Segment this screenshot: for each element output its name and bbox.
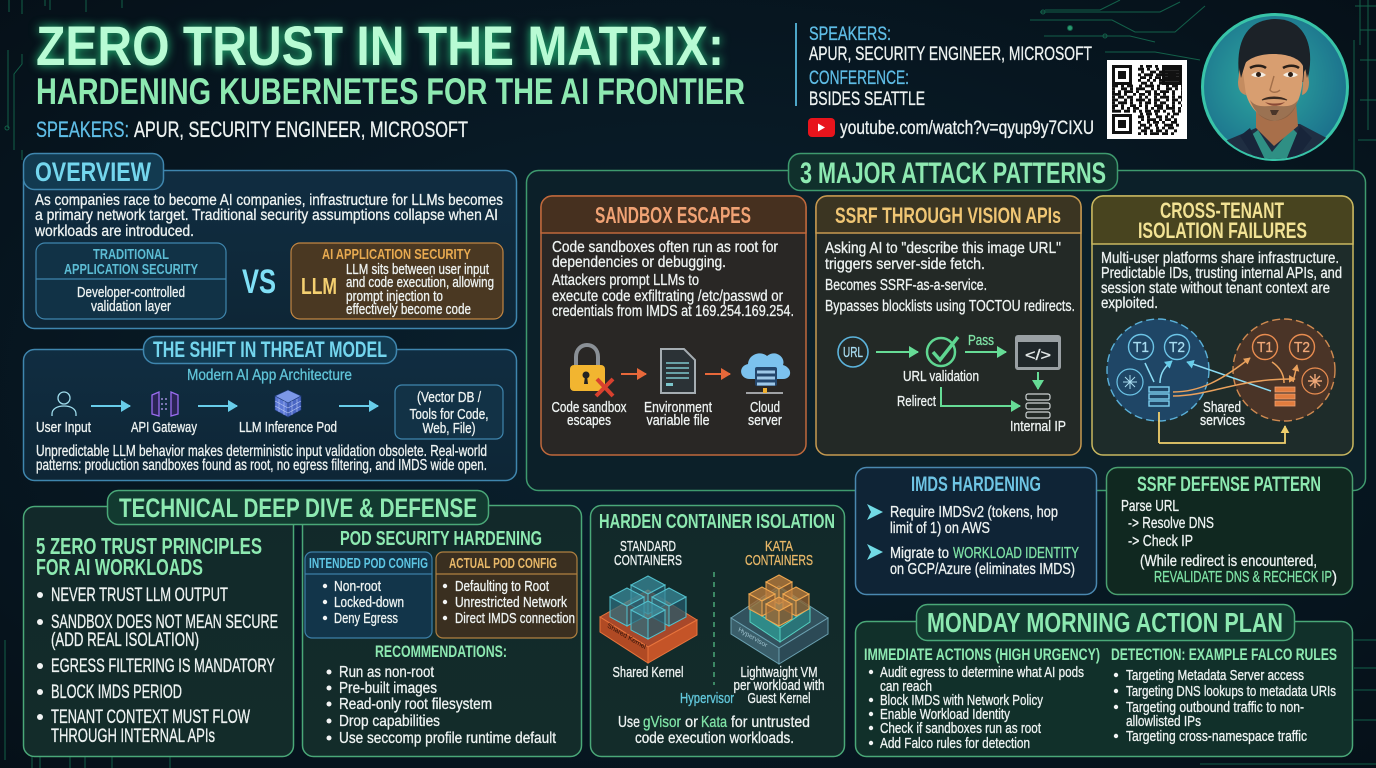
panel: harden container isolation: HARDEN CONTAINER ISOLATION: [599, 511, 835, 533]
arrow: [91, 405, 130, 407]
immediate actions list: Enable Workload Identity: [880, 706, 1010, 723]
isolation recommendation: Kata: [701, 714, 727, 731]
youtube url: youtube.com/watch?v=qyup9y7CIXU: [840, 118, 1094, 139]
tools box: (Vector DB /: [417, 389, 482, 406]
principles list: BLOCK IMDS PERIOD: [51, 682, 182, 703]
actual pod config: [436, 552, 577, 638]
sandbox text: Attackers prompt LLMs to: [552, 272, 699, 289]
heading tab: technical deep dive: TECHNICAL DEEP DIVE & DEFENSE: [119, 493, 477, 523]
panel: imds hardening: IMDS HARDENING: [911, 473, 1041, 496]
icon: url: URL: [843, 344, 863, 361]
imds bullet 1: limit of 1) on AWS: [890, 520, 990, 537]
comparison: ai application security: and code execution, allowing: [346, 274, 494, 291]
panel: the shift in threat model: [24, 336, 516, 480]
principles list: (ADD REAL ISOLATION): [51, 630, 199, 651]
sandbox text: dependencies or debugging.: [552, 254, 726, 271]
panel: harden container isolation: [590, 506, 844, 756]
actual pod config: Defaulting to Root: [455, 578, 550, 595]
actual pod config: Unrestricted Network: [455, 594, 567, 611]
immediate actions list: can reach: [880, 678, 932, 695]
container labels: Shared Kernel: [612, 664, 684, 681]
isolation recommendation: Use: [618, 714, 640, 731]
icon: user: [52, 392, 76, 416]
icon: internal server: [1026, 394, 1050, 418]
icon: broken lock: [570, 345, 613, 396]
ssrf text: Bypasses blocklists using TOCTOU redirects.: [825, 298, 1075, 315]
actual pod config: Direct IMDS connection: [455, 610, 575, 627]
defense pattern steps: Parse URL: [1121, 498, 1179, 515]
card: sandbox escapes: [541, 196, 806, 455]
intended pod config: Non-root: [334, 578, 382, 595]
threat model text: patterns: production sandboxes found as root, no egress filtering, and IMDS wide open.: [36, 457, 487, 474]
arrow: pass: Pass: [968, 332, 994, 349]
panel: 5 zero trust principles: [24, 506, 294, 756]
recommendations: Read-only root filesystem: [339, 696, 492, 713]
defense pattern steps: ): [1332, 569, 1337, 586]
orange tenant zone: [1233, 319, 1335, 421]
isolation recommendation: [618, 714, 810, 747]
arrow: [339, 405, 378, 407]
heading tab: action plan: MONDAY MORNING ACTION PLAN: [927, 607, 1283, 638]
panel: 5 zero trust principles: 5 ZERO TRUST PRINCIPLES: [36, 533, 262, 559]
isolation recommendation: or: [685, 714, 699, 731]
panel: 3 major attack patterns: [526, 154, 1366, 490]
icon: cloud server: [741, 353, 790, 393]
arrow: [705, 373, 730, 375]
heading tab: overview: [24, 154, 164, 190]
heading tab: technical deep dive: [108, 490, 488, 524]
intended pod config: INTENDED POD CONFIG: [309, 555, 428, 572]
arrow: [198, 405, 237, 407]
tools box: Tools for Code,: [410, 406, 488, 423]
card: sandbox escapes: SANDBOX ESCAPES: [595, 202, 751, 228]
vs label: VS: [242, 263, 276, 301]
comparison: ai application security: AI APPLICATION SECURITY: [322, 246, 471, 263]
ssrf flow labels: [897, 368, 1066, 435]
card: ssrf through vision apis: [816, 196, 1081, 455]
card: cross-tenant isolation failures: [1092, 196, 1353, 455]
imds bullet 2: Migrate to: [890, 545, 949, 562]
detection rules list: Targeting outbound traffic to non-: [1126, 699, 1304, 716]
heading tab: threat model: [144, 336, 396, 364]
immediate actions list: Block IMDS with Network Policy: [880, 692, 1043, 709]
principles list: [37, 585, 278, 747]
detection rules list: allowlisted IPs: [1126, 713, 1201, 730]
icon: code window: [1015, 335, 1061, 370]
sandbox flow labels: variable file: [646, 412, 710, 429]
icon: youtube: [808, 118, 835, 137]
container labels: Lightwaight VM: [740, 664, 818, 681]
sandbox text: Code sandboxes often run as root for: [552, 239, 779, 256]
icon: code window: </>: [1025, 347, 1051, 364]
overview text: a primary network target. Traditional security assumptions collapse when AI: [35, 207, 498, 224]
title: ZERO TRUST IN THE MATRIX:: [36, 14, 724, 77]
icon: inference pod cube: [275, 390, 301, 417]
container labels: Guest Kernel: [748, 690, 810, 707]
diagram: standard containers on shared kernel: [600, 576, 697, 663]
sandbox flow labels: server: [748, 412, 782, 429]
comparison: traditional application security: APPLICATION SECURITY: [64, 261, 198, 278]
comparison: ai application security: prompt injection to: [346, 288, 443, 305]
title: HARDENING KUBERNETES FOR THE AI FRONTIER: [36, 71, 745, 112]
recommendations: Drop capabilities: [339, 713, 440, 730]
recommendations: Pre-built images: [339, 680, 437, 697]
sandbox flow labels: Cloud: [750, 399, 780, 416]
sandbox flow labels: Environment: [644, 399, 713, 416]
card: cross-tenant isolation failures: CROSS-TENANT: [1160, 198, 1284, 223]
diagram: standard containers on shared kernel: Shared Kernel: [606, 622, 647, 651]
principles list: THROUGH INTERNAL APIs: [51, 726, 215, 747]
recommendations: RECOMMENDATIONS:: [375, 642, 507, 661]
recommendations: Use seccomp profile runtime default: [339, 730, 556, 747]
imds bullet 1: Require IMDSv2 (tokens, hop: [890, 504, 1058, 521]
heading tab: threat model: THE SHIFT IN THREAT MODEL: [153, 337, 387, 362]
immediate actions list: Audit egress to determine what AI pods: [880, 664, 1084, 681]
panel: pod security hardening: POD SECURITY HARDENING: [340, 528, 542, 550]
imds bullet 1: [867, 504, 1058, 537]
column headings: [614, 538, 813, 569]
overview text: As companies race to become AI companies, infrastructure for LLMs becomes: [35, 192, 503, 209]
arrow: redirect: [941, 387, 1020, 406]
detection rules list: [1111, 645, 1337, 745]
speaker and conference info: APUR, SECURITY ENGINEER, MICROSOFT: [809, 44, 1092, 65]
tenant diagram: [1107, 319, 1335, 443]
panel: 5 zero trust principles: FOR AI WORKLOADS: [36, 554, 203, 580]
comparison: ai application security: effectively become code: [346, 301, 471, 318]
overview text: [34, 192, 503, 240]
shared services label: [1200, 399, 1245, 429]
principles list: SANDBOX DOES NOT MEAN SECURE: [51, 612, 278, 633]
principles list: TENANT CONTEXT MUST FLOW: [51, 707, 250, 728]
sandbox flow labels: escapes: [567, 412, 611, 429]
immediate actions list: IMMEDIATE ACTIONS (HIGH URGENCY): [864, 645, 1100, 664]
speakers line: SPEAKERS:: [36, 117, 129, 142]
blue tenant zone: T2: [1169, 339, 1185, 356]
defense pattern steps: (While redirect is encountered,: [1140, 553, 1317, 570]
column headings: STANDARD: [620, 538, 676, 555]
ssrf flow labels: URL validation: [903, 368, 979, 385]
shared services link: [1159, 412, 1285, 443]
orange tenant zone: T1: [1257, 339, 1273, 356]
diagram: kata containers: Hypervisor: [737, 626, 769, 650]
comparison: traditional application security: validation layer: [91, 298, 171, 315]
tenant crossing arrows: [1145, 358, 1297, 396]
panel: overview: [24, 154, 516, 328]
intended pod config: [305, 552, 432, 638]
isolation recommendation: code execution workloads.: [635, 730, 794, 747]
icon: url: [838, 337, 868, 367]
speakers line: [36, 117, 468, 142]
speaker and conference info: [795, 23, 1092, 110]
intended pod config: Locked-down: [334, 594, 404, 611]
detection rules list: Targeting cross-namespace traffic: [1126, 728, 1307, 745]
sandbox flow labels: Code sandbox: [552, 399, 627, 416]
panel: monday morning action plan: [856, 604, 1352, 756]
heading tab: attack patterns: 3 MAJOR ATTACK PATTERNS: [800, 157, 1106, 190]
comparison: ai application security: [291, 243, 503, 319]
blue tenant zone: T1: [1133, 339, 1149, 356]
panel: ssrf defense pattern: [1106, 468, 1352, 594]
defense pattern steps: -> Check IP: [1128, 533, 1193, 550]
speaker and conference info: CONFERENCE:: [809, 68, 909, 89]
cross-tenant text: exploited.: [1101, 295, 1158, 312]
panel: pod security hardening: [302, 506, 582, 756]
arrow: [1037, 372, 1039, 389]
container labels: Hypervisor: [680, 690, 734, 707]
architecture subtitle: Modern AI App Architecture: [187, 367, 352, 384]
card: cross-tenant isolation failures: ISOLATION FAILURES: [1138, 218, 1307, 243]
column headings: KATA: [765, 538, 793, 555]
intended pod config: Deny Egress: [334, 610, 398, 627]
ssrf flow labels: Internal IP: [1010, 418, 1066, 435]
recommendations: [326, 642, 556, 747]
pipeline labels: [36, 419, 337, 436]
column headings: CONTAINERS: [614, 552, 682, 569]
actual pod config: ACTUAL POD CONFIG: [449, 555, 557, 572]
column headings: CONTAINERS: [745, 552, 813, 569]
heading tab: overview: OVERVIEW: [35, 157, 151, 187]
icon: validation check: [927, 337, 958, 366]
orange tenant zone: T2: [1294, 339, 1310, 356]
principles list: EGRESS FILTERING IS MANDATORY: [51, 656, 275, 677]
isolation recommendation: gVisor: [643, 714, 682, 731]
sandbox text: credentials from IMDS at 169.254.169.254.: [552, 303, 794, 320]
ssrf text: triggers server-side fetch.: [825, 256, 985, 273]
diagram: kata containers: [731, 575, 828, 664]
detection rules list: Targeting Metadata Server access: [1126, 667, 1304, 684]
sandbox text: execute code exfiltrating /etc/passwd or: [552, 288, 784, 305]
pipeline labels: API Gateway: [131, 419, 197, 436]
shared services label: services: [1200, 412, 1245, 429]
pipeline labels: LLM Inference Pod: [239, 419, 337, 436]
ssrf text: Asking AI to "describe this image URL": [825, 240, 1061, 257]
defense pattern steps: [1121, 498, 1337, 586]
immediate actions list: Add Falco rules for detection: [880, 735, 1030, 752]
overview text: workloads are introduced.: [34, 223, 194, 240]
tools box: [395, 385, 503, 439]
panel: imds hardening: [856, 468, 1096, 594]
defense pattern steps: -> Resolve DNS: [1128, 515, 1214, 532]
immediate actions list: [864, 645, 1100, 752]
cross-tenant text: [1101, 250, 1342, 312]
blue tenant zone: [1107, 319, 1209, 421]
speaker and conference info: SPEAKERS:: [809, 24, 891, 45]
arrow: [876, 351, 918, 353]
isolation recommendation: for untrusted: [731, 714, 810, 731]
ssrf text: Becomes SSRF-as-a-service.: [825, 277, 987, 294]
imds bullet 2: WORKLOAD IDENTITY: [953, 545, 1079, 562]
container labels: per workload with: [734, 677, 824, 694]
sandbox text: [552, 239, 794, 320]
principles list: NEVER TRUST LLM OUTPUT: [51, 585, 228, 606]
heading tab: attack patterns: [788, 154, 1118, 190]
comparison: ai application security: LLM sits between user input: [346, 261, 490, 278]
card: ssrf through vision apis: SSRF THROUGH VISION APIs: [835, 203, 1061, 228]
speakers line: APUR, SECURITY ENGINEER, MICROSOFT: [134, 117, 468, 142]
immediate actions list: Check if sandboxes run as root: [880, 720, 1042, 737]
speaker and conference info: BSIDES SEATTLE: [809, 89, 925, 110]
comparison: traditional application security: TRADITIONAL: [93, 246, 169, 263]
arrow: [621, 373, 646, 375]
comparison: traditional application security: Developer-controlled: [77, 284, 185, 301]
imds bullet 2: on GCP/Azure (eliminates IMDS): [890, 561, 1075, 578]
section: technical deep dive and defense: [24, 490, 582, 756]
arrow: pass: [965, 332, 1006, 352]
recommendations: Run as non-root: [339, 664, 434, 681]
ssrf text: [825, 240, 1075, 315]
sandbox flow labels: [552, 399, 782, 429]
cross-tenant text: session state without tenant context are: [1101, 280, 1330, 297]
title: [36, 14, 745, 112]
pipeline labels: User Input: [36, 419, 92, 436]
ssrf flow labels: Relirect: [897, 393, 937, 410]
comparison: traditional application security: [36, 243, 226, 319]
container labels: [612, 664, 824, 707]
speaker portrait: [1201, 13, 1349, 170]
qr code: [1107, 60, 1187, 139]
threat model text: Unpredictable LLM behavior makes deterministic input validation obsolete. Real-world: [36, 443, 487, 460]
icon: document: [661, 349, 695, 393]
shared services label: Shared: [1203, 399, 1241, 416]
imds bullet 2: [867, 544, 1079, 578]
icon: api gateway: [152, 392, 178, 416]
tools box: Web, File): [422, 420, 476, 437]
comparison: ai application security: LLM: [301, 273, 337, 299]
threat model text: [36, 443, 487, 474]
